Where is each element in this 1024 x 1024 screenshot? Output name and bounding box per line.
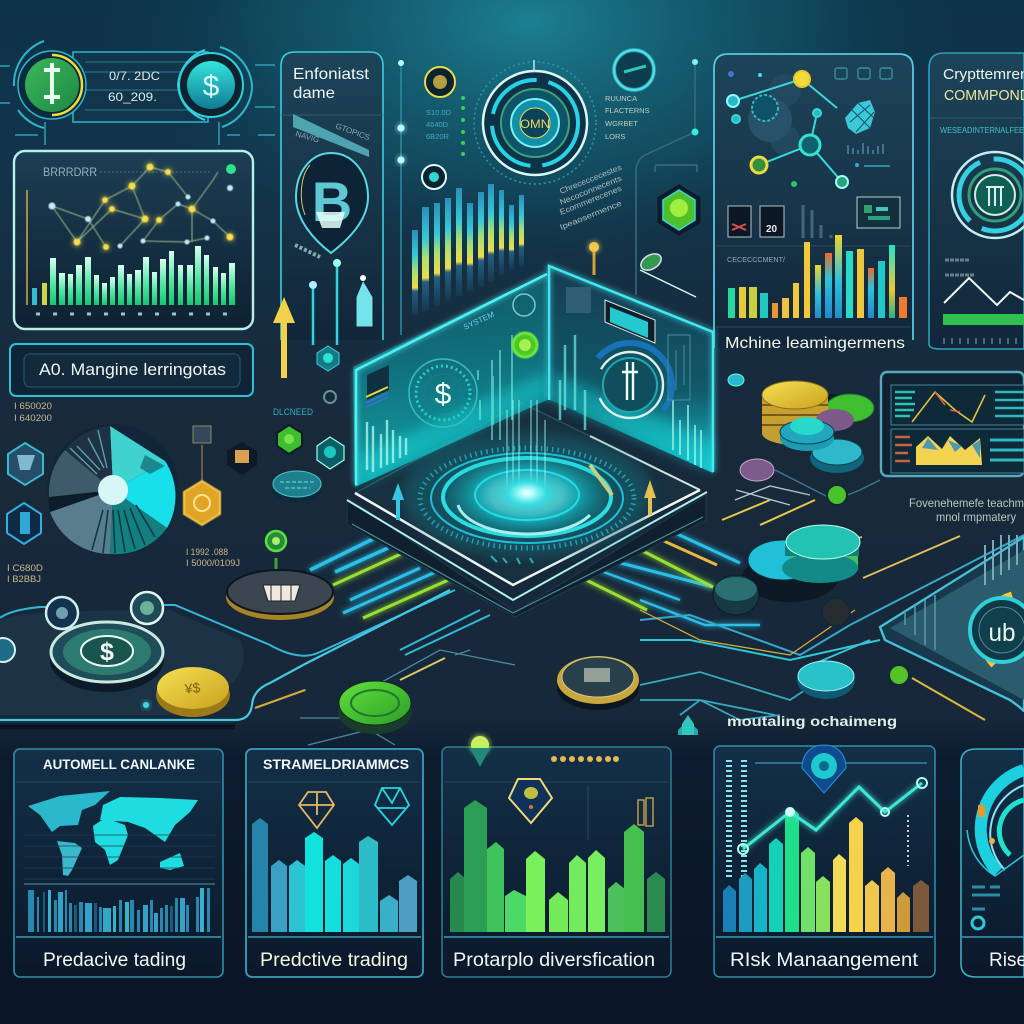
platform base [347, 403, 707, 617]
arrow: teal connectors with hexagon [309, 259, 373, 371]
bar chart: multicolour [728, 205, 907, 318]
icon: teal gauge top [614, 50, 654, 90]
wires and circuit paths [0, 470, 1024, 745]
panel: tablet gauge [880, 535, 1024, 712]
icon: green pin over coin [266, 531, 286, 574]
radial dial on platform [402, 433, 652, 557]
coin: small navy [46, 597, 78, 629]
icon: teal hexagon [317, 437, 344, 469]
mini tiles: 20 [766, 224, 778, 235]
bar chart: centre vertical bars [412, 184, 524, 315]
text: stat labels: I 640200 [14, 413, 52, 423]
icon: green small coin [827, 485, 847, 505]
star rating row [551, 756, 619, 762]
line chart: zigzag [944, 278, 1024, 305]
text: small dial stats: S10.0D [426, 108, 452, 117]
panel: machine learning [714, 54, 913, 352]
icon: small tower [638, 798, 653, 826]
text: small dial stats: 4640D [426, 120, 449, 129]
text: skewed notes: Chrececcecestes [558, 163, 623, 196]
gauge: partial ring [967, 770, 1024, 876]
coin: dark gold right [557, 656, 639, 710]
text: dashboard caption [909, 496, 1024, 524]
icon: central radial dial [474, 60, 596, 184]
text: title: AUTOMELL CANLANKE [43, 756, 195, 772]
text: small dial stats: 6B20R [426, 132, 450, 141]
text: bar caption: CECECCCMENT/ [727, 257, 785, 264]
text: caption: Predctive trading [260, 950, 408, 971]
coin: gold [156, 667, 230, 717]
text: caption: Protarplo diversfication [453, 950, 655, 971]
coin stack: right of platform [740, 381, 874, 481]
icon: leaf coin [638, 250, 664, 274]
text: date values [108, 69, 160, 104]
bar chart: gradient bars [723, 808, 929, 932]
text: skewed notes: Necoconnecents [558, 174, 623, 207]
coin: grey small [822, 598, 850, 626]
text: skewed notes [558, 163, 624, 232]
coin: T dial [571, 326, 689, 444]
coin: gold: ¥$ [183, 679, 201, 697]
text: small legend [972, 887, 1000, 909]
text: stat labels: I B2BBJ [7, 574, 41, 584]
network nodes [727, 71, 890, 188]
panel: risk, cropped at right edge [961, 749, 1024, 977]
text: dial notes: RUUNCA [605, 94, 637, 103]
coins: left tray cluster [0, 592, 244, 717]
icon: yellow ring coin [425, 67, 455, 97]
icon: central radial dial: OMN [520, 117, 550, 131]
icon: top connector gear [324, 391, 336, 403]
text: date values: 60_209. [108, 90, 157, 104]
icon: torch glow [589, 242, 599, 275]
icon: teal ring coin [422, 165, 446, 189]
circuit line right [636, 59, 698, 297]
coin stack: teal [742, 525, 860, 602]
icon: green hexagon [277, 425, 302, 454]
icons: diamonds [299, 788, 409, 828]
text: dial notes: LORS [605, 132, 625, 141]
icon: dark gold hexagon [227, 442, 257, 475]
text: skewed notes: Ipeaosermence [558, 199, 624, 232]
coin: green [338, 681, 412, 734]
gauge ring [970, 595, 1024, 665]
icon: gold shield [509, 779, 552, 823]
icon: pie side hexagons [7, 443, 43, 544]
text: small dial stats [426, 96, 465, 156]
coin: dollar [50, 622, 164, 692]
text: panel title: dame [293, 85, 335, 102]
icon: glowing top badge [470, 736, 490, 767]
icon: green coin [18, 51, 86, 119]
gauge ticks [729, 760, 744, 880]
text: chart heading: BRRRDRR [43, 165, 97, 179]
text: stat labels: DLCNEED [273, 407, 313, 417]
text: title: STRAMELDRIAMMCS [263, 756, 409, 772]
panel: trading dashboard [881, 372, 1024, 476]
text: dial notes: WGRBET [605, 119, 638, 128]
icon: gold hexagon chip [184, 426, 220, 525]
coin: edge [0, 638, 15, 662]
text: panel title: Enfoniatst [293, 66, 370, 83]
panel: blockchain shield: GTOPICS [334, 121, 371, 142]
panel: blockchain shield: NAVIG [294, 129, 320, 145]
world map [28, 791, 198, 876]
panel: crypto components [929, 53, 1024, 349]
coin: dollar: $ [100, 638, 114, 666]
coin: small grey [131, 592, 163, 624]
text: stat labels: I 1992 .088 [186, 547, 228, 557]
text: panel title: Mchine leamingermens [725, 335, 905, 352]
coin: dollar dial: $ [435, 378, 452, 411]
coin: dark teal [713, 575, 759, 615]
text: panel title [293, 66, 370, 102]
panel: automated compliance [14, 749, 223, 977]
panel: portfolio diversification [442, 736, 671, 977]
text: stat labels: I C680D [7, 563, 44, 573]
mini tiles [728, 197, 900, 237]
tray panel fill [0, 610, 244, 715]
pie chart [47, 424, 179, 556]
ring icon [952, 152, 1024, 238]
text: title [943, 66, 1024, 104]
icon: top teal pin [802, 745, 846, 793]
line chart: trend [738, 778, 927, 854]
bar chart: green [450, 800, 665, 932]
bar chart: mini bars [28, 888, 210, 932]
line network [48, 164, 234, 250]
hologram right [548, 266, 713, 473]
text: dial notes [605, 94, 650, 141]
panel: risk management [714, 745, 935, 977]
text: stat labels: I 5000/0109J [186, 558, 240, 568]
arrow: yellow up [273, 297, 295, 378]
text: caption: RIsk Manaangement [730, 950, 919, 971]
bar chart: green bars [32, 246, 235, 305]
bar chart: cyan [252, 818, 417, 932]
progress bar [943, 314, 1024, 325]
icon: bitcoin shield: B [312, 170, 352, 233]
panel: streamlined dynamics [246, 749, 423, 977]
light beam and green pin [491, 333, 563, 515]
coin: small teal [272, 471, 322, 503]
platform arrows [392, 480, 656, 564]
label box: AI machine learning: A0. Mangine lerringotas [39, 360, 226, 379]
text: stat labels: I 650020 [14, 401, 52, 411]
text: skewed notes: Ecommerecenes [558, 184, 623, 217]
timeline nodes [398, 53, 512, 335]
coin: teal medium [797, 661, 855, 699]
badge bar: top-left coins [0, 41, 275, 145]
text: dial notes: FLACTERNS [605, 106, 650, 115]
coin: dollar dial [409, 359, 477, 427]
text: stat labels [7, 401, 313, 584]
icon: green hexagon beacon [655, 165, 699, 290]
text: currency mark: ub [988, 619, 1016, 647]
text: mining caption: moutaling ochaimeng [727, 713, 897, 729]
panel: blockchain shield [281, 52, 383, 340]
text: dashboard caption: mnol rmpmatery [936, 510, 1016, 524]
icon: cyan dollar coin [179, 53, 243, 117]
icon: rocket marker [678, 715, 698, 735]
icon: cyan dollar coin: $ [203, 70, 220, 103]
hologram left: SYSTEM [462, 310, 496, 332]
text: caption: Predacive tading [43, 950, 186, 971]
panel: network and bar chart [14, 151, 253, 329]
panel: central hologram platform [347, 266, 713, 617]
text: date values: 0/7. 2DC [109, 69, 160, 83]
hologram left [353, 273, 547, 487]
coin: green marker [889, 665, 909, 685]
label box: AI machine learning [10, 344, 253, 396]
icon: small teal marker [728, 374, 744, 386]
icon: bitcoin shield [296, 153, 368, 253]
coin: dark central [226, 570, 334, 620]
